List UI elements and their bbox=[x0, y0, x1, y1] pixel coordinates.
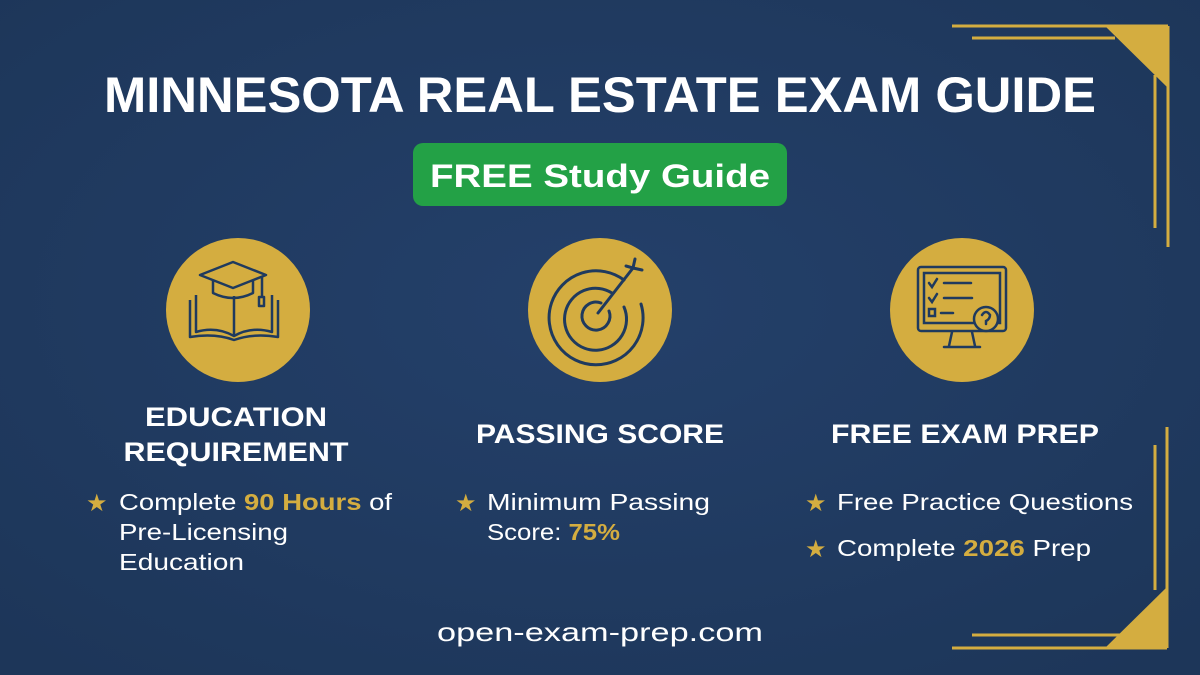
decoration: top-right corner bbox=[952, 26, 1168, 247]
bullets: education: Education bbox=[119, 549, 244, 575]
bullets: education: Pre-Licensing bbox=[119, 519, 288, 545]
icon: graduation cap and book bbox=[166, 238, 310, 382]
bullets: education: ★ bbox=[86, 490, 108, 517]
badge: FREE Study Guide bbox=[413, 143, 787, 206]
heading: Free Exam Prep: FREE EXAM PREP bbox=[831, 419, 1099, 449]
bullets: education: Complete 90 Hours of bbox=[119, 489, 393, 515]
title: MINNESOTA REAL ESTATE EXAM GUIDE bbox=[104, 67, 1096, 123]
bullets: passing score: Score: 75% bbox=[487, 519, 620, 545]
decoration: bottom-right corner bbox=[952, 427, 1167, 648]
bullets: free exam prep: ★ bbox=[805, 536, 827, 563]
heading: Education Requirement: REQUIREMENT bbox=[124, 437, 349, 467]
heading: Education Requirement bbox=[124, 402, 349, 467]
bullets: free exam prep: Free Practice Questions bbox=[837, 489, 1133, 515]
bullets: free exam prep: Complete 2026 Prep bbox=[837, 535, 1091, 561]
bullets: free exam prep bbox=[805, 489, 1133, 563]
heading: Education Requirement: EDUCATION bbox=[145, 402, 327, 432]
bullets: free exam prep: ★ bbox=[805, 490, 827, 517]
icon: computer monitor checklist bbox=[890, 238, 1034, 382]
footer url: open-exam-prep.com bbox=[437, 617, 763, 647]
bullets: education bbox=[86, 489, 393, 575]
badge: FREE Study Guide: FREE Study Guide bbox=[430, 158, 770, 194]
icon: target with arrow bbox=[528, 238, 672, 382]
bullets: passing score: ★ bbox=[455, 490, 477, 517]
bullets: passing score bbox=[455, 489, 710, 545]
bullets: passing score: Minimum Passing bbox=[487, 489, 710, 515]
heading: Passing Score: PASSING SCORE bbox=[476, 419, 724, 449]
